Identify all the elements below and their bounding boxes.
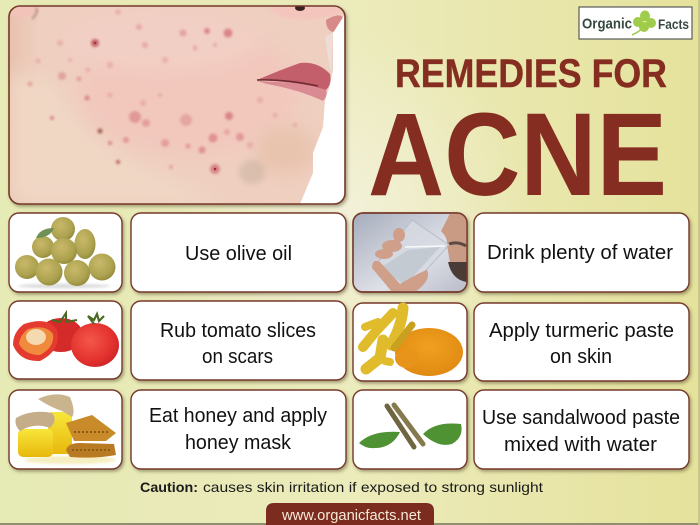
card: honey text	[131, 390, 346, 469]
card: water text: Drink plenty of water	[487, 242, 673, 264]
acne spots	[28, 10, 297, 174]
title: acne: ACNE	[368, 89, 667, 221]
back jar	[48, 412, 72, 454]
card: sandalwood text	[474, 390, 689, 469]
card: honey text: Eat honey and apply	[149, 405, 327, 427]
caution note: causes skin irritation if exposed to strong sunlight	[203, 479, 543, 495]
card: sandalwood text: mixed with water	[504, 434, 657, 456]
honeycomb	[66, 415, 116, 441]
logo: Organic Facts: Facts	[658, 16, 689, 32]
card: tomato text	[131, 301, 346, 380]
card: turmeric text: Apply turmeric paste	[489, 320, 674, 342]
card: tomato text: Rub tomato slices	[160, 320, 316, 342]
card: olive oil text: Use olive oil	[185, 243, 292, 265]
card: olives image	[9, 213, 122, 292]
glass	[378, 220, 450, 284]
logo: Organic Facts: Organic	[582, 16, 632, 32]
hand	[372, 228, 428, 292]
lips	[257, 63, 330, 90]
panel: acne skin photo	[9, 5, 345, 204]
face	[441, 214, 466, 262]
card: drinking water image	[353, 213, 467, 292]
ear	[10, 7, 40, 16]
front jar	[18, 429, 53, 457]
white background right of face	[300, 14, 345, 204]
card: sandalwood text: Use sandalwood paste	[482, 407, 680, 429]
logo: Organic Facts	[579, 7, 692, 39]
neck shading	[10, 74, 39, 203]
nose	[270, 7, 341, 18]
card: honey image	[9, 390, 122, 469]
card: olive oil text	[131, 213, 346, 292]
card: tomatoes image	[9, 301, 122, 379]
cheek blush	[80, 25, 300, 155]
caution note: Caution:	[140, 479, 198, 495]
card: sandalwood image	[353, 390, 467, 469]
stubble	[239, 160, 265, 184]
footer: website tab: www.organicfacts.net	[281, 507, 422, 524]
card: tomato text: on scars	[202, 346, 273, 368]
card: turmeric text: on skin	[550, 346, 612, 368]
card: turmeric text	[474, 303, 689, 381]
footer: website tab	[266, 503, 434, 525]
card: honey text: honey mask	[185, 432, 292, 454]
icon: clover	[632, 10, 656, 35]
card: water text	[474, 213, 689, 292]
card: turmeric image	[353, 303, 467, 381]
cut tomato	[13, 321, 58, 361]
title: remedies for: REMEDIES FOR	[395, 52, 667, 96]
